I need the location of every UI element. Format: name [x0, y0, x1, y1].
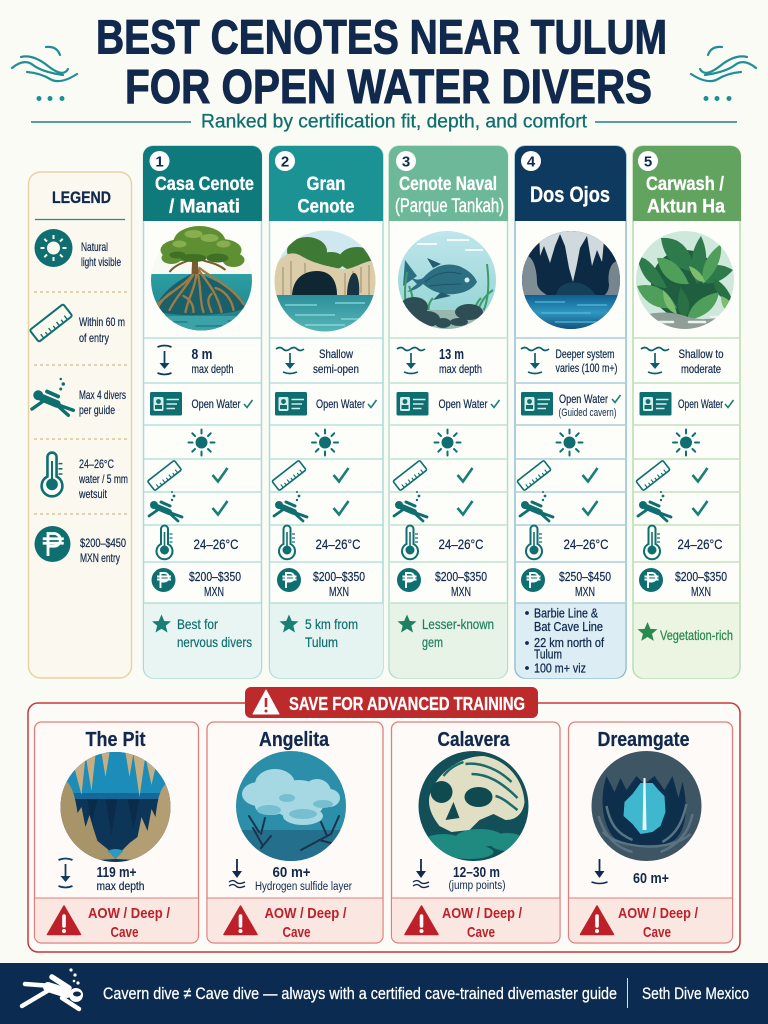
header: (Parque Tankah)	[395, 196, 504, 217]
note: Tulum	[305, 634, 338, 650]
legend item: max divers	[32, 378, 126, 417]
note: Lesser-known	[422, 616, 494, 632]
header: Cenote Naval	[399, 174, 497, 195]
depth: deeper system	[521, 347, 618, 375]
temperature	[644, 526, 722, 559]
illustration: angelita cloud	[236, 751, 346, 862]
icon: waves left	[12, 47, 77, 101]
depth: 8 m: max depth	[192, 362, 234, 376]
diver check	[149, 491, 228, 521]
card: Calavera: AOW / Deep /	[442, 905, 523, 922]
price: MXN	[329, 584, 349, 599]
price	[521, 568, 611, 599]
subtitle: Ranked by certification fit, depth, and comfort	[201, 112, 588, 132]
depth: 8 m: 8 m	[192, 346, 212, 363]
certification: Open Water	[559, 392, 608, 406]
price	[277, 568, 365, 599]
note	[280, 614, 358, 650]
temperature	[279, 526, 360, 559]
card: Calavera	[392, 722, 560, 943]
header: Carwash /	[646, 174, 725, 195]
note	[638, 622, 733, 643]
title: FOR OPEN WATER DIVERS	[125, 61, 652, 114]
card: Calavera: (jump points)	[448, 880, 506, 892]
header: Gran	[306, 174, 346, 195]
price: $200–$350	[189, 569, 241, 584]
legend item: within 60 m: of entry	[79, 331, 109, 345]
header	[389, 146, 508, 221]
note: 22 km north of	[534, 635, 604, 650]
price: MXN	[575, 584, 595, 599]
legend item: entry price	[34, 526, 126, 565]
note: Barbie Line &	[534, 606, 598, 620]
illustration: the pit	[60, 752, 170, 862]
panel: cenote 3 Cenote Naval	[389, 146, 508, 678]
title	[96, 12, 667, 114]
card: Angelita: Angelita	[259, 729, 330, 751]
header: / Manati	[169, 196, 240, 218]
header	[515, 146, 626, 221]
header	[143, 146, 262, 221]
legend item: within 60 m	[30, 304, 125, 345]
note	[398, 614, 494, 650]
temperature: 24–26°C	[564, 536, 608, 552]
legend item: entry price: MXN entry	[80, 551, 120, 565]
legend item: natural light	[34, 229, 121, 269]
depth: deeper system: varies (100 m+)	[556, 361, 618, 375]
depth: shallow to moderate: Shallow to	[678, 347, 724, 361]
note: Tulum	[534, 646, 562, 662]
note: 5 km from	[305, 616, 358, 632]
card: Angelita: 60 m+	[272, 864, 311, 881]
legend item: natural light: Natural	[81, 240, 108, 254]
header: 3	[402, 154, 410, 170]
price: MXN	[204, 584, 224, 599]
card: Dreamgate: Cave	[643, 924, 671, 941]
temperature: 24–26°C	[678, 536, 722, 552]
price: $200–$350	[435, 569, 487, 584]
note	[152, 614, 252, 650]
header: 1	[155, 154, 164, 170]
card: The Pit: 119 m+	[96, 864, 137, 881]
illustration: dreamgate	[592, 751, 702, 861]
note: 100 m+ viz	[534, 660, 586, 676]
icon: sun	[556, 430, 582, 456]
diver check	[520, 491, 598, 521]
header: Casa Cenote	[155, 174, 254, 195]
legend item: temperature	[42, 453, 128, 501]
panel: cenote 1 Casa Cenote	[143, 146, 262, 678]
depth: 13 m: 13 m	[439, 346, 464, 363]
illustration: cave with stalactites	[522, 230, 620, 330]
card: Calavera: Cave	[467, 924, 495, 941]
certification: (Guided cavern)	[558, 407, 616, 419]
diver check	[274, 491, 348, 521]
price	[639, 568, 727, 599]
temperature	[402, 526, 484, 559]
price: $200–$350	[675, 569, 727, 584]
illustration: skull	[418, 751, 528, 861]
ruler check	[636, 460, 708, 491]
note: Bat Cave Line	[534, 619, 603, 634]
icon: sun	[434, 430, 460, 456]
header: Cenote	[298, 196, 354, 218]
note: nervous divers	[177, 634, 252, 650]
card: Dreamgate: AOW / Deep /	[618, 905, 699, 922]
legend item: entry price: $200–$450	[80, 536, 126, 550]
certification	[150, 392, 252, 416]
note: gem	[422, 634, 443, 650]
badge	[245, 687, 538, 718]
card: Angelita: Hydrogen sulfide layer	[255, 881, 352, 893]
icon: waves right	[691, 47, 756, 101]
depth: 13 m	[397, 346, 482, 376]
card: Angelita: Cave	[282, 924, 310, 941]
header	[633, 146, 741, 221]
note: Vegetation-rich	[660, 627, 733, 643]
price: $200–$350	[313, 569, 365, 584]
depth: shallow to moderate	[641, 347, 724, 376]
legend item: natural light: light visible	[81, 255, 121, 269]
depth: 13 m: max depth	[439, 362, 482, 376]
footer bar	[0, 963, 768, 1024]
price: MXN	[691, 584, 711, 599]
temperature: 24–26°C	[316, 536, 360, 552]
icon: sun	[312, 430, 338, 456]
card: Calavera: 12–30 m	[453, 864, 500, 881]
depth: shallow to moderate: moderate	[681, 362, 721, 376]
certification: Open Water	[678, 397, 723, 411]
header: 5	[644, 154, 652, 170]
diver check	[638, 491, 708, 521]
ruler check	[517, 460, 598, 491]
temperature	[526, 526, 608, 559]
badge: SAVE FOR ADVANCED TRAINING	[289, 694, 525, 714]
panel: cenote 2 Gran Cenote	[269, 146, 383, 678]
illustration: cave arch	[274, 226, 376, 335]
icon: diver white	[22, 968, 83, 1009]
temperature	[156, 526, 238, 559]
illustration: mangrove	[150, 226, 252, 332]
panel: cenote 4 Dos Ojos	[515, 146, 626, 678]
note: Best for	[177, 616, 218, 632]
card: The Pit: AOW / Deep /	[88, 905, 171, 922]
header: 4	[527, 154, 536, 170]
card: Dreamgate	[568, 722, 732, 943]
card: Angelita	[207, 722, 383, 943]
card: The Pit: Cave	[110, 924, 138, 941]
depth: 8 m	[158, 346, 234, 376]
legend item: temperature: water / 5 mm	[78, 472, 128, 486]
note	[525, 606, 604, 676]
certification: Open Water	[316, 397, 365, 411]
card: The Pit: The Pit	[86, 729, 146, 751]
header: Aktun Ha	[647, 196, 725, 218]
header: 2	[281, 154, 289, 170]
depth: deeper system: Deeper system	[556, 347, 614, 361]
depth: shallow	[276, 347, 359, 376]
depth: shallow: Shallow	[319, 347, 353, 361]
icon: sun	[673, 430, 699, 456]
price: MXN	[451, 584, 471, 599]
header: Dos Ojos	[530, 182, 610, 207]
legend item: max divers: per guide	[79, 403, 115, 417]
card: Dreamgate: Dreamgate	[598, 729, 690, 751]
panel: save for advanced training	[28, 687, 740, 952]
price: $250–$450	[559, 569, 611, 584]
ruler check	[147, 460, 228, 491]
header	[269, 146, 383, 221]
card: The Pit: max depth	[96, 879, 144, 893]
certification: Open Water	[192, 397, 241, 411]
certification	[396, 392, 500, 416]
ruler check	[272, 460, 348, 491]
card: Angelita: AOW / Deep /	[264, 905, 347, 922]
price	[397, 568, 487, 599]
illustration: leaves	[636, 231, 734, 330]
card: The Pit	[34, 722, 198, 943]
panel: legend	[28, 172, 132, 678]
legend item: within 60 m: Within 60 m	[79, 315, 125, 329]
legend item: max divers: Max 4 divers	[79, 388, 126, 402]
illustration: fish	[398, 231, 496, 330]
certification	[640, 392, 734, 416]
ruler check	[393, 460, 472, 491]
temperature: 24–26°C	[194, 536, 238, 552]
certification	[521, 392, 620, 419]
panel: legend: LEGEND	[52, 188, 111, 207]
diver check	[394, 491, 472, 521]
card: Dreamgate: 60 m+	[633, 870, 669, 887]
certification	[275, 392, 376, 416]
certification: Open Water	[438, 397, 488, 411]
icon: sun	[188, 430, 214, 456]
price	[152, 568, 241, 599]
temperature: 24–26°C	[438, 536, 484, 552]
legend item: temperature: 24–26°C	[79, 457, 114, 471]
footer bar: Cavern dive ≠ Cave dive — always with a certified cave-trained divemaster guide	[103, 984, 617, 1003]
depth: shallow: semi-open	[313, 362, 359, 376]
card: Calavera: Calavera	[438, 729, 510, 751]
legend item: temperature: wetsuit	[78, 487, 107, 501]
panel: cenote 5 Carwash	[633, 146, 741, 678]
